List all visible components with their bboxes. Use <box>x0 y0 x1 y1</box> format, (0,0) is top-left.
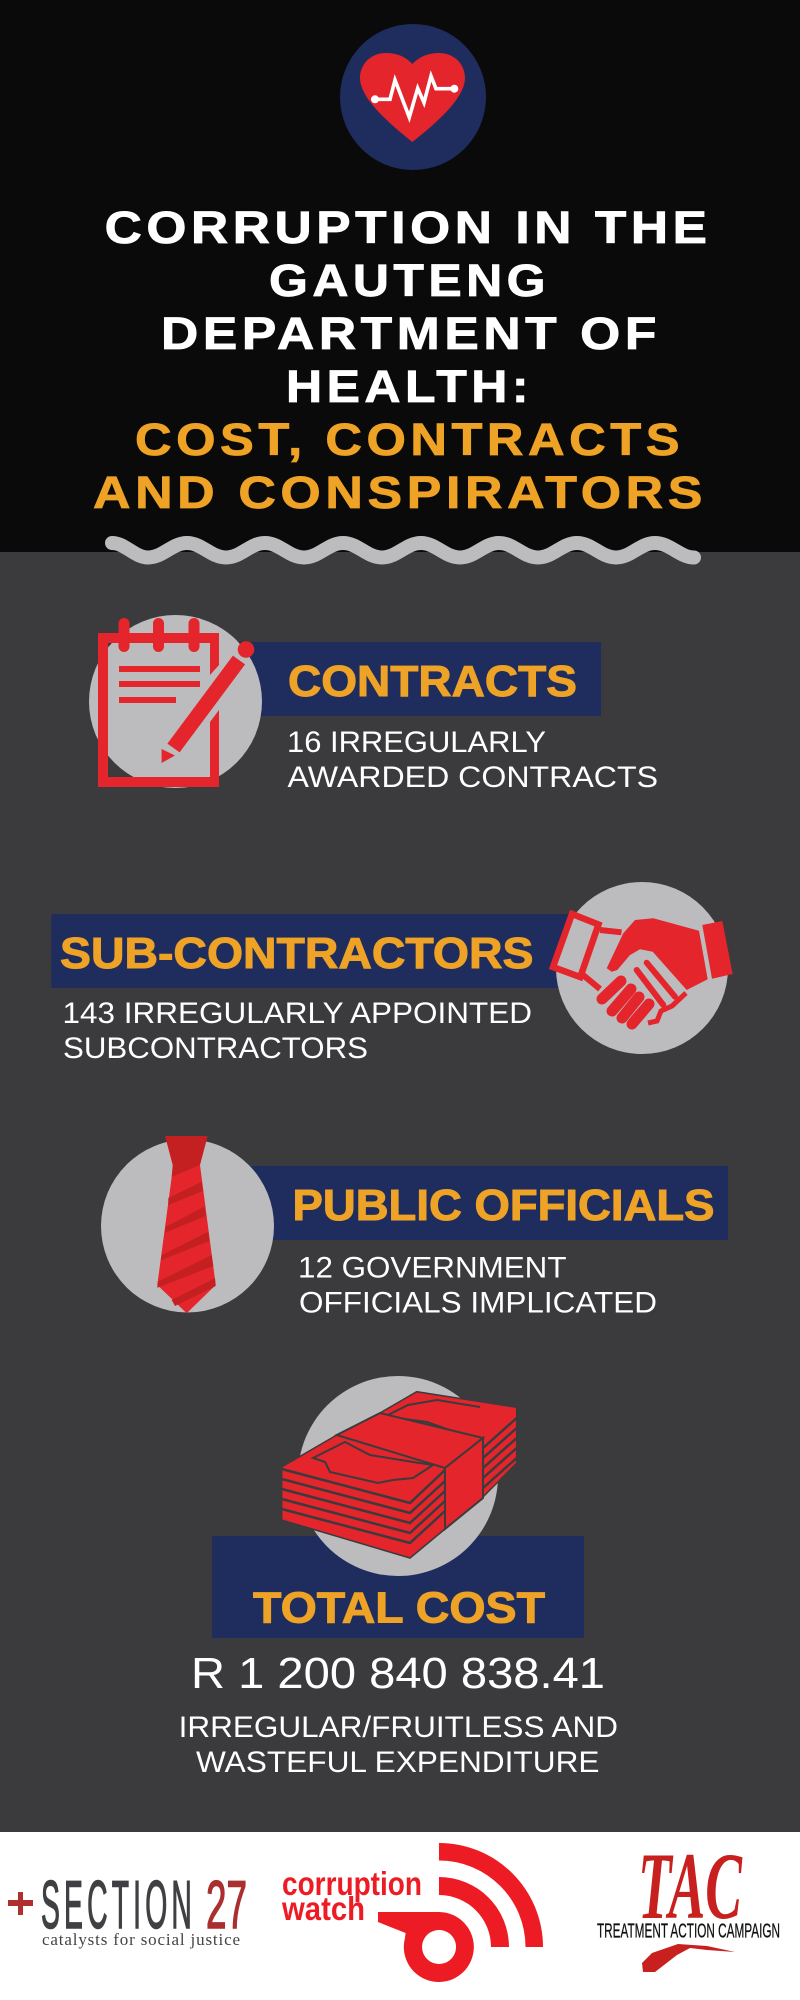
label bar: total cost <box>212 1536 584 1638</box>
label bar: contracts <box>89 615 601 788</box>
text: officials count: OFFICIALS IMPLICATED <box>299 1287 657 1320</box>
logo: Section27: 27 <box>206 1867 247 1943</box>
label bar: public officials <box>101 1140 728 1312</box>
text: sub-contractors count: 143 IRREGULARLY APPOINTED <box>62 997 532 1030</box>
icon: money stack <box>282 1376 517 1576</box>
panel: public officials <box>101 1136 728 1320</box>
logo: Section27: SECTION <box>41 1867 196 1943</box>
text: sub-contractors count: SUBCONTRACTORS <box>63 1032 368 1065</box>
logo: Section27: catalysts for social justice <box>42 1930 240 1949</box>
main panel background <box>0 552 800 1832</box>
logo: Corruption Watch: corruption <box>282 1865 422 1902</box>
text: total amount: R 1 200 840 838.41 <box>191 1649 605 1698</box>
title: GAUTENG <box>269 255 550 306</box>
wave divider <box>112 543 694 558</box>
title: DEPARTMENT OF <box>161 308 661 359</box>
logo: Corruption Watch <box>281 1843 543 1982</box>
footer panel: partner logos <box>0 1832 800 2000</box>
logo: Treatment Action Campaign <box>597 1833 780 1972</box>
text: expenditure description: IRREGULAR/FRUITLESS AND <box>179 1711 618 1744</box>
text: expenditure description: WASTEFUL EXPENDITURE <box>196 1746 600 1779</box>
logo: Corruption Watch: watch <box>281 1890 365 1927</box>
label: total cost: TOTAL COST <box>253 1584 545 1633</box>
title <box>93 202 712 518</box>
text: contracts count <box>287 726 658 794</box>
label bar: sub-contractors <box>51 914 571 988</box>
text: officials count <box>298 1252 657 1320</box>
title: HEALTH: <box>286 361 533 412</box>
label bar: public officials: PUBLIC OFFICIALS <box>292 1181 714 1230</box>
icon: handshake <box>553 882 733 1054</box>
title: CORRUPTION IN THE <box>105 202 712 253</box>
text: officials count: 12 GOVERNMENT <box>298 1252 566 1285</box>
text: expenditure description <box>179 1711 618 1779</box>
header panel <box>0 0 800 552</box>
text: contracts count: AWARDED CONTRACTS <box>288 761 658 794</box>
title: COST, CONTRACTS <box>135 414 684 465</box>
text: sub-contractors count <box>62 997 532 1065</box>
title: AND CONSPIRATORS <box>93 467 707 518</box>
panel: contracts <box>89 615 658 794</box>
panel: sub-contractors <box>51 882 733 1065</box>
icon: heart with pulse <box>340 24 486 170</box>
icon: notepad and pencil <box>98 618 254 787</box>
icon: necktie <box>157 1136 216 1313</box>
label bar: sub-contractors: SUB-CONTRACTORS <box>60 929 534 978</box>
logo: Section27 <box>8 1867 247 1949</box>
panel: total cost <box>179 1376 618 1779</box>
label bar: contracts: CONTRACTS <box>288 657 577 706</box>
text: contracts count: 16 IRREGULARLY <box>287 726 546 759</box>
